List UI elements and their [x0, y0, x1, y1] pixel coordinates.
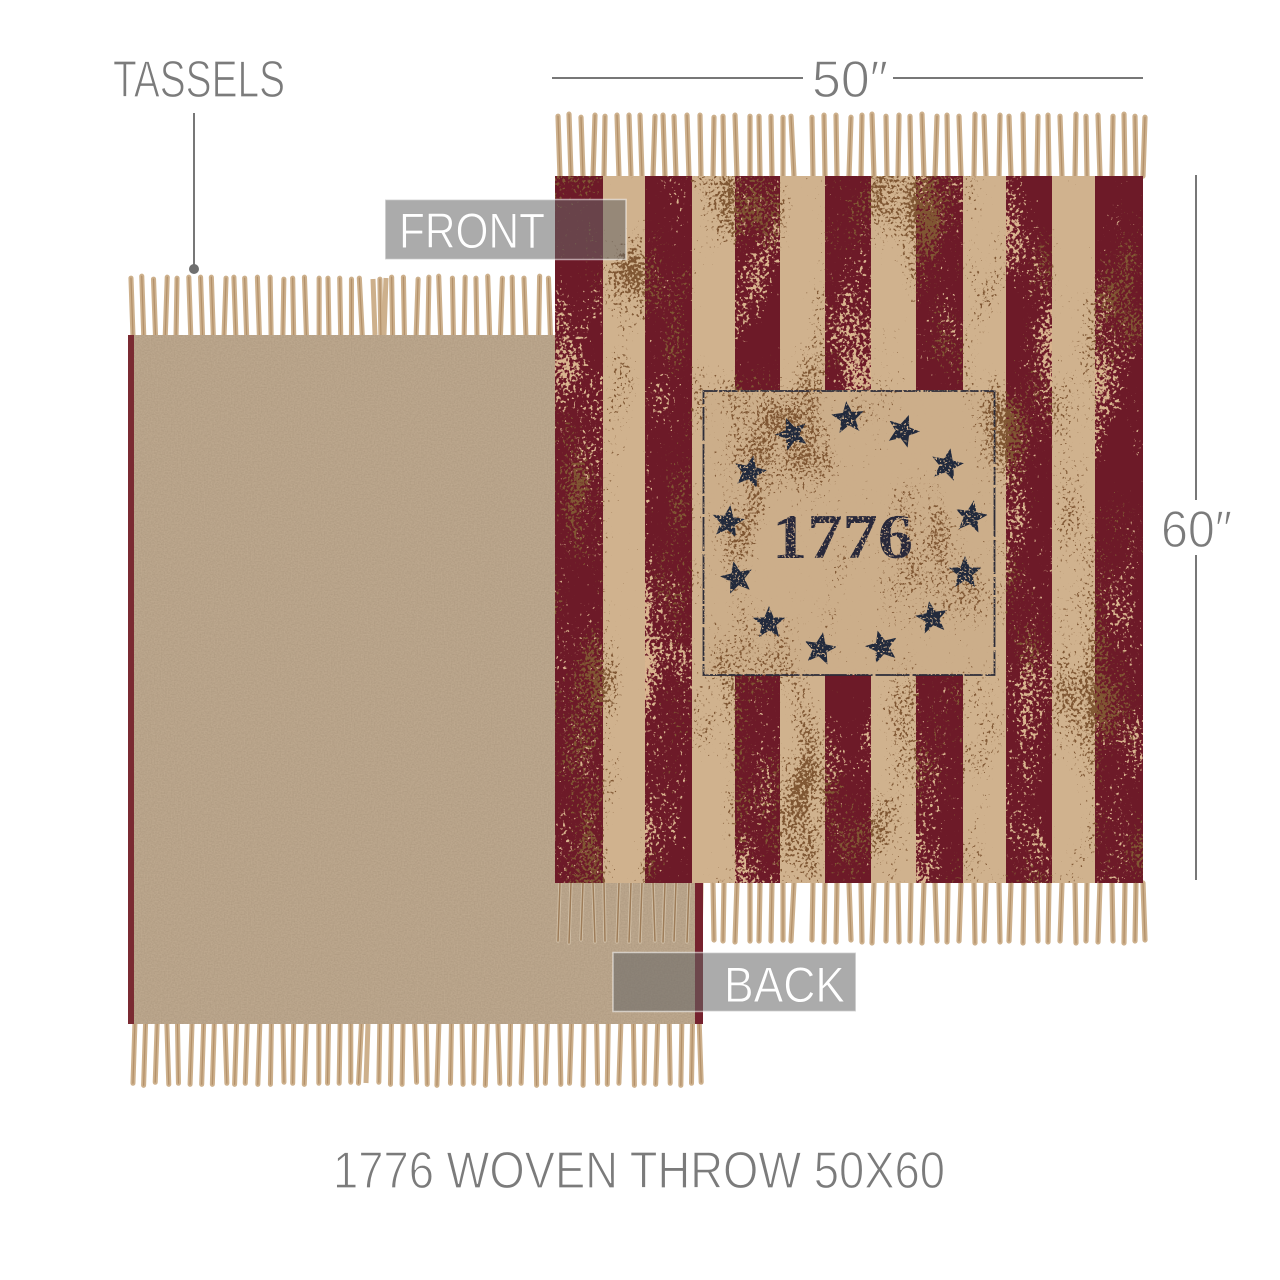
ring of thirteen stars — [710, 399, 990, 666]
BACK label — [613, 952, 856, 1013]
back bottom tassels — [133, 1024, 701, 1085]
front striped fabric — [555, 176, 1143, 883]
worn print speckle — [703, 390, 995, 675]
back top tassels — [128, 274, 553, 335]
infographic canvas — [114, 61, 1230, 1188]
front top tassels — [558, 114, 1145, 176]
height dimension 60 inches — [1155, 175, 1240, 880]
tassels callout — [113, 51, 285, 274]
FRONT label — [385, 200, 626, 260]
back throw — [128, 276, 706, 1085]
height dimension 60 inches: 60″ — [1161, 501, 1232, 559]
1776 stamp text: 1776 — [772, 501, 913, 572]
front throw — [555, 114, 1145, 943]
tassels callout: TASSELS — [113, 51, 285, 109]
back fabric panel — [128, 335, 703, 1024]
FRONT label: FRONT — [399, 203, 545, 259]
1776 center patch — [702, 389, 996, 676]
width dimension 50 inches: 50″ — [812, 51, 888, 109]
front bottom tassels — [703, 880, 1148, 946]
product title: 1776 WOVEN THROW 50X60 — [333, 1142, 945, 1200]
front tassels showing through back fabric — [556, 883, 691, 945]
BACK label: BACK — [724, 957, 845, 1013]
